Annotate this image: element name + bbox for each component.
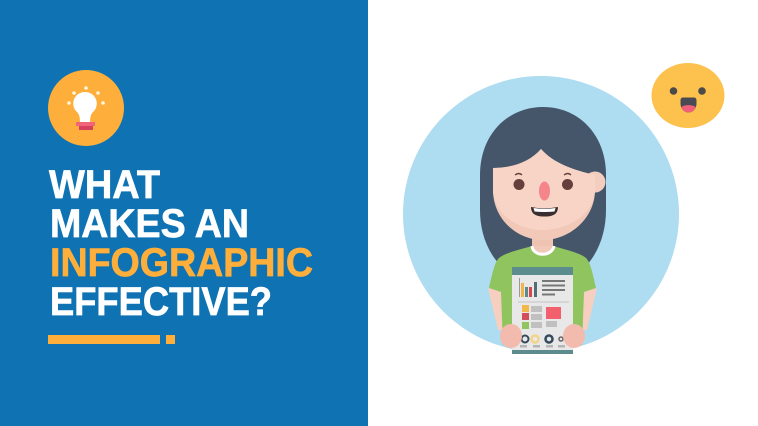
tablet bbox=[512, 267, 573, 354]
title: WHAT bbox=[49, 163, 160, 207]
icon list bbox=[522, 305, 542, 329]
title underline bars bbox=[48, 335, 175, 344]
panel: blue title panel bbox=[0, 0, 368, 426]
emoji: happy face bbox=[652, 63, 724, 128]
divider bbox=[518, 302, 569, 303]
title bbox=[49, 163, 313, 324]
icon: light bulb badge bbox=[48, 70, 124, 146]
face bbox=[493, 149, 606, 240]
title: INFOGRAPHIC bbox=[50, 241, 313, 285]
shirt bbox=[489, 246, 596, 345]
hair bbox=[480, 107, 606, 265]
mouth bbox=[531, 207, 558, 217]
character: girl holding tablet bbox=[480, 107, 606, 354]
text lines bbox=[542, 280, 565, 296]
arms bbox=[488, 288, 597, 330]
bar chart bbox=[519, 278, 537, 297]
red highlight block bbox=[546, 307, 561, 319]
neck bbox=[532, 225, 553, 255]
nose bbox=[539, 182, 550, 200]
title: EFFECTIVE? bbox=[50, 280, 272, 324]
collar bbox=[532, 246, 554, 254]
eyes and brows bbox=[514, 174, 573, 190]
hands bbox=[500, 324, 585, 348]
donut charts bbox=[522, 336, 563, 342]
background circle bbox=[403, 76, 679, 352]
title: MAKES AN bbox=[50, 202, 249, 246]
ear bbox=[584, 172, 606, 192]
donut captions bbox=[520, 345, 565, 348]
grey caption block bbox=[546, 321, 557, 327]
